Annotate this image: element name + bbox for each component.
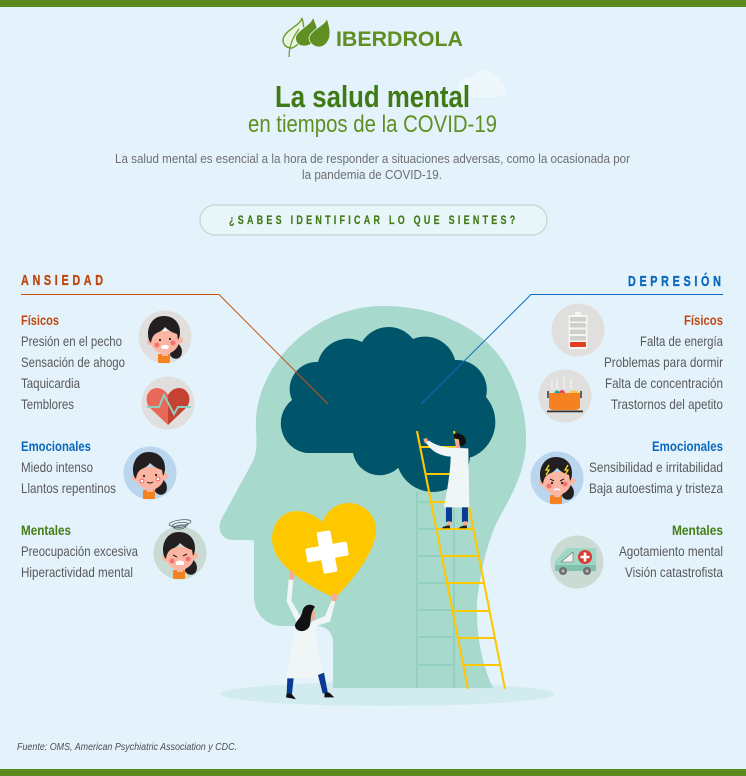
- ansiedad: emocionales: [21, 438, 116, 496]
- title: [248, 80, 497, 138]
- depresion: mentales: Visión catastrofista: [625, 564, 723, 580]
- ladder shadow: [417, 492, 454, 688]
- source note: Fuente: OMS, American Psychiatric Association y CDC.: [17, 742, 237, 753]
- depresion: fisicos: Falta de concentración: [605, 375, 723, 391]
- intro paragraph: [115, 152, 630, 182]
- ansiedad: fisicos: [21, 312, 125, 412]
- depresion: mentales: Agotamiento mental: [619, 543, 723, 559]
- woman holding heart: [286, 570, 338, 699]
- depresion: mentales: Mentales: [672, 522, 723, 538]
- ansiedad: emocionales: Emocionales: [21, 438, 91, 454]
- ansiedad: fisicos: Presión en el pecho: [21, 333, 122, 349]
- depresion: fisicos: Trastornos del apetito: [611, 396, 723, 412]
- intro paragraph: la pandemia de COVID-19.: [302, 168, 442, 182]
- depresion: emocionales: Sensibilidad e irritabilidad: [589, 459, 723, 475]
- depresion: emocionales: [589, 438, 723, 496]
- icon: irritated face: [530, 452, 584, 504]
- question pill: [200, 205, 547, 235]
- depresion: fisicos: Falta de energía: [640, 333, 723, 349]
- icon: ambulance: [550, 536, 604, 588]
- ansiedad: mentales: Hiperactividad mental: [21, 564, 133, 580]
- icon: dizzy face: [154, 518, 206, 580]
- icon: white cross: [305, 530, 349, 574]
- ansiedad: mentales: Preocupación excesiva: [21, 543, 138, 559]
- heading: depresion: DEPRESIÓN: [628, 272, 721, 289]
- depresion connector line: [421, 294, 723, 404]
- ansiedad connector line: [21, 294, 328, 404]
- title: en tiempos de la COVID-19: [248, 111, 497, 138]
- top bar: [0, 0, 746, 7]
- man on ladder: [423, 433, 469, 528]
- icon: heart with pulse: [142, 376, 194, 430]
- ansiedad: mentales: Mentales: [21, 522, 71, 538]
- icon: fearful face: [124, 446, 176, 500]
- icon: chest pressure face: [138, 310, 192, 364]
- bottom bar: [0, 769, 746, 776]
- ansiedad: fisicos: Sensación de ahogo: [21, 354, 125, 370]
- ansiedad: fisicos: Temblores: [21, 396, 74, 412]
- depresion: emocionales: Emocionales: [652, 438, 723, 454]
- ansiedad: mentales: [21, 522, 138, 580]
- ansiedad: fisicos: Taquicardia: [21, 375, 80, 391]
- logo: Iberdrola: [283, 17, 463, 57]
- head silhouette: [220, 306, 554, 706]
- ansiedad: emocionales: Llantos repentinos: [21, 480, 116, 496]
- ground shadow: [220, 682, 554, 706]
- heading: ansiedad: ANSIEDAD: [21, 271, 103, 288]
- intro paragraph: La salud mental es esencial a la hora de responder a situaciones adversas, como la ocasionada por: [115, 152, 630, 166]
- ansiedad: emocionales: Miedo intenso: [21, 459, 93, 475]
- question pill: ¿SABES IDENTIFICAR LO QUE SIENTES?: [229, 215, 515, 227]
- depresion: mentales: [619, 522, 723, 580]
- heart with medical cross: [272, 503, 376, 598]
- logo: Iberdrola: IBERDROLA: [336, 28, 463, 51]
- decorative cloud: [457, 70, 505, 97]
- depresion: fisicos: Problemas para dormir: [604, 354, 723, 370]
- depresion: fisicos: [604, 312, 723, 412]
- icon: cooking pot: [538, 370, 592, 422]
- brain: [281, 327, 495, 492]
- ladder: [417, 431, 505, 689]
- depresion: fisicos: Físicos: [684, 312, 723, 328]
- ansiedad: fisicos: Físicos: [21, 312, 59, 328]
- title: La salud mental: [275, 80, 470, 114]
- depresion: emocionales: Baja autoestima y tristeza: [589, 480, 723, 496]
- icon: low battery: [552, 304, 604, 356]
